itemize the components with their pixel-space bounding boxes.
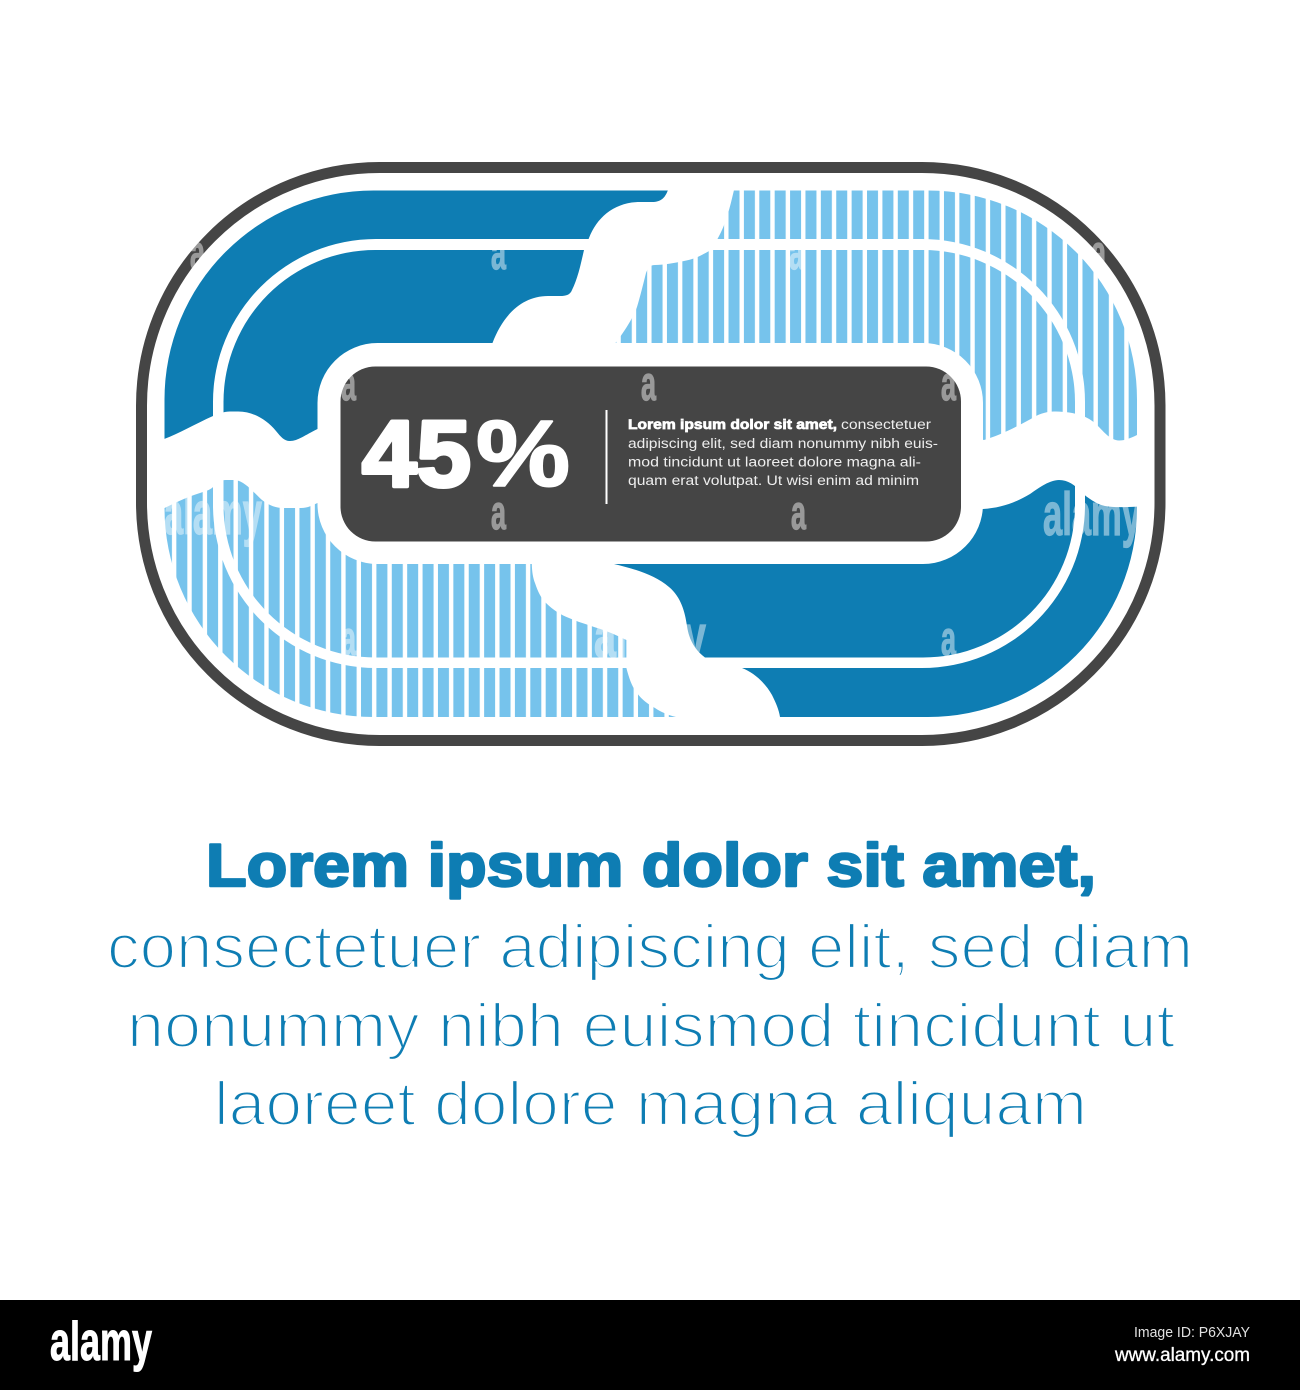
stock-photo watermarks: a (491, 227, 506, 280)
stock-photo watermarks: a (190, 227, 205, 280)
stock-photo watermarks: a (1091, 227, 1106, 280)
heading: Lorem ipsum dolor sit amet, (206, 832, 1096, 899)
footer bar (0, 1300, 1300, 1390)
stock-photo watermarks: a (641, 358, 656, 411)
stat description (628, 417, 938, 488)
stock-photo watermarks: a (341, 613, 356, 666)
stock-photo watermarks: a (941, 358, 956, 411)
stock-photo watermarks: a (789, 227, 804, 280)
stock-photo watermarks: alamy (1043, 481, 1141, 548)
central dark stat panel (340, 366, 961, 542)
stat description: consectetuer (841, 417, 932, 432)
track chart: 45 percent ring segments (150, 180, 1150, 730)
stock-photo watermarks: alamy (164, 480, 262, 547)
segment: bottom-right solid blue (614, 480, 1150, 730)
body text (107, 913, 1193, 1139)
big stat: 45%: % (476, 401, 570, 506)
stock-photo watermarks (164, 227, 1141, 670)
big stat: 45% (362, 401, 570, 506)
stat description: adipiscing elit, sed diam nonummy nibh euis- (628, 436, 938, 451)
stock-photo watermarks: a (791, 487, 806, 540)
outer rounded track outline (142, 168, 1160, 740)
segment: bottom-left striped light blue (150, 480, 676, 730)
stock-photo watermarks: a (941, 613, 956, 666)
body text: nonummy nibh euismod tincidunt ut (127, 992, 1175, 1061)
stock-photo watermarks: alamy (594, 603, 706, 670)
footer image id: Image ID: P6XJAY (1134, 1324, 1250, 1341)
big stat: 45%: 45 (362, 401, 471, 506)
segment: top-left solid blue (150, 180, 668, 445)
stat divider (606, 410, 608, 504)
stock-photo watermarks: a (341, 358, 356, 411)
segment: top-right striped light blue (616, 180, 1150, 440)
stock-photo watermarks: a (491, 487, 506, 540)
stat description: quam erat volutpat. Ut wisi enim ad minim (628, 473, 919, 488)
body text: laoreet dolore magna aliquam (214, 1070, 1087, 1139)
body text: consectetuer adipiscing elit, sed diam (107, 913, 1193, 982)
stat description: Lorem ipsum dolor sit amet, (628, 417, 837, 432)
heading and body copy (107, 832, 1193, 1139)
stat description: mod tincidunt ut laoreet dolore magna ali- (628, 454, 921, 470)
footer logo: alamy (50, 1310, 152, 1372)
footer url: www.alamy.com (1114, 1345, 1250, 1366)
